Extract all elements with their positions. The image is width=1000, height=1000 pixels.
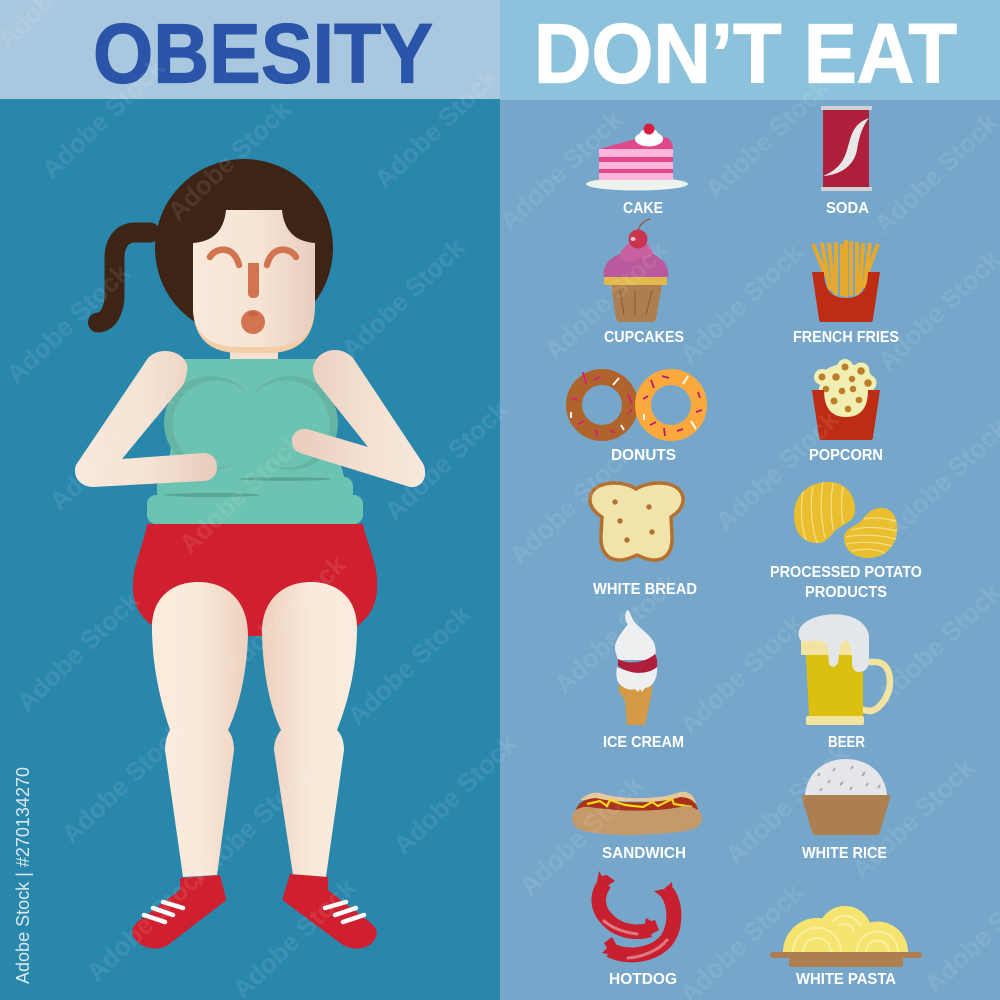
watermark: adobe stock repeated: Adobe Stock [548, 567, 684, 699]
watermark: adobe stock repeated: Adobe Stock [35, 52, 171, 184]
icon: popcorn [812, 359, 880, 440]
label: cake: CAKE [623, 200, 663, 217]
label: processed potato products: PRODUCTS [805, 584, 887, 601]
watermark: adobe stock repeated: Adobe Stock [709, 404, 845, 536]
icon: beer mug [798, 614, 890, 725]
shorts [133, 524, 377, 636]
header band: obesity [0, 0, 500, 99]
icon: sausages [597, 871, 674, 958]
panel: obesity background [0, 99, 500, 1000]
watermark: adobe stock repeated: Adobe Stock [503, 438, 639, 570]
hair and ponytail [98, 159, 333, 337]
top [147, 359, 363, 524]
label: white pasta: WHITE PASTA [796, 971, 896, 988]
watermark: adobe stock repeated: Adobe Stock [673, 237, 809, 369]
label: white bread: WHITE BREAD [593, 581, 697, 598]
label: ice cream: ICE CREAM [603, 734, 684, 751]
watermark: adobe stock repeated: Adobe Stock [845, 752, 981, 884]
watermark: adobe stock repeated: Adobe Stock [387, 728, 523, 860]
watermark: adobe stock repeated: Adobe Stock [868, 107, 1000, 239]
icon: sandwich hot dog in bun [572, 792, 702, 835]
left leg [152, 582, 248, 877]
icon: soda can [821, 106, 872, 191]
icon: white rice [802, 759, 890, 835]
title: obesity: OBESITY [93, 6, 433, 100]
label: popcorn: POPCORN [809, 447, 883, 464]
header band: don't eat [500, 0, 1000, 100]
watermark: adobe stock repeated: Adobe Stock [341, 599, 477, 731]
watermark: adobe stock repeated: Adobe Stock [538, 234, 674, 366]
watermark: adobe stock repeated: Adobe Stock [719, 738, 855, 870]
label: hotdog: HOTDOG [609, 971, 677, 988]
label: processed potato products: PROCESSED POTATO [770, 564, 922, 581]
watermark: adobe stock repeated: Adobe Stock [55, 717, 191, 849]
watermark: adobe stock repeated: Adobe Stock [0, 257, 136, 389]
watermark: adobe stock repeated: Adobe Stock [493, 104, 629, 236]
icon: cupcake [604, 219, 668, 322]
icon: donuts [571, 372, 702, 436]
watermark: adobe stock repeated: Adobe Stock [161, 94, 297, 226]
right shoe [283, 874, 377, 949]
watermark: adobe stock repeated: Adobe Stock [335, 232, 471, 364]
icon: ice cream [615, 610, 657, 725]
title: don't eat: DON’T EAT [534, 6, 957, 100]
icon: white bread [590, 483, 683, 560]
watermark: adobe stock repeated: Adobe Stock [378, 394, 514, 526]
label: beer: BEER [828, 734, 865, 751]
stock credit vertical text: Adobe Stock | #270134270 [13, 767, 33, 984]
left shoe [132, 875, 226, 949]
left arm [75, 351, 217, 487]
watermark: adobe stock repeated: Adobe Stock [80, 855, 216, 987]
watermark: adobe stock repeated: Adobe Stock [699, 72, 835, 204]
label: donuts: DONUTS [611, 447, 676, 464]
neck [230, 345, 278, 360]
watermark: adobe stock repeated: Adobe Stock [513, 769, 649, 901]
label: french fries: FRENCH FRIES [793, 329, 899, 346]
face [193, 210, 315, 353]
figure: obese woman [75, 159, 425, 949]
icon: cake [586, 124, 688, 190]
watermark: adobe stock repeated: Adobe Stock [173, 427, 309, 559]
label: soda: SODA [826, 200, 869, 217]
label: sandwich: SANDWICH [602, 845, 686, 862]
right leg [262, 582, 357, 877]
icon: potato chips [794, 482, 897, 558]
watermark: adobe stock repeated: Adobe Stock [216, 549, 352, 681]
watermark: adobe stock repeated: Adobe Stock [368, 62, 504, 194]
icon: white pasta [770, 906, 922, 967]
watermark: adobe stock repeated: Adobe Stock [43, 384, 179, 516]
label: cupcakes: CUPCAKES [604, 329, 684, 346]
watermark: adobe stock repeated: Adobe Stock [183, 759, 319, 891]
label: processed potato products [770, 564, 922, 601]
panel: don't eat background [500, 100, 1000, 1000]
right arm [292, 350, 425, 487]
label: white rice: WHITE RICE [802, 845, 887, 862]
icon: french fries [812, 240, 880, 322]
watermark: adobe stock repeated: Adobe Stock [10, 585, 146, 717]
watermark: adobe stock repeated: Adobe Stock [673, 608, 809, 740]
